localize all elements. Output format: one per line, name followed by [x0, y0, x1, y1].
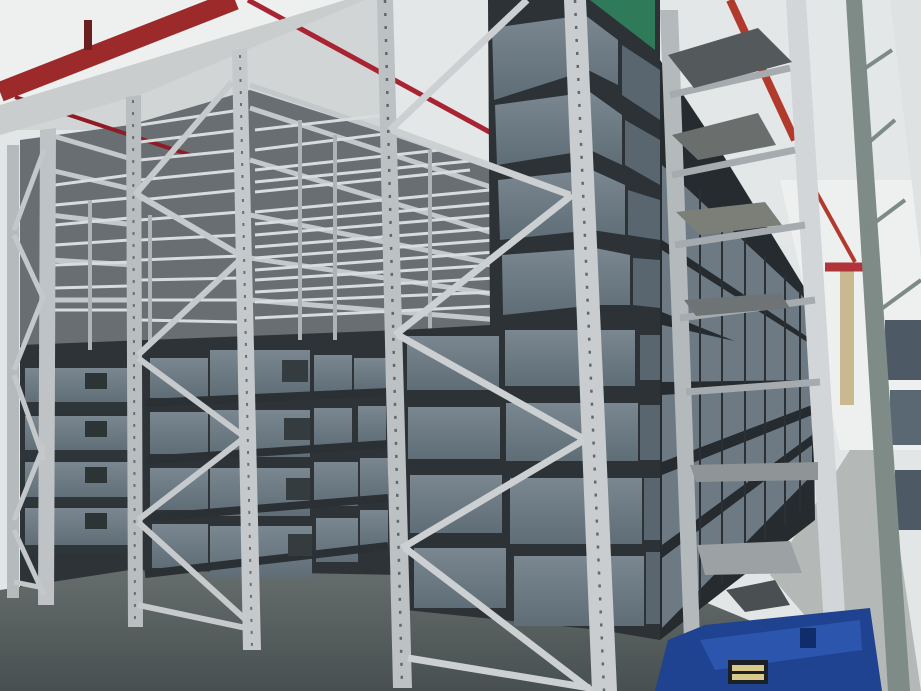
upper shelf decks: [50, 85, 500, 350]
dark backing behind front bin stack: [402, 0, 660, 640]
bins: front rack column: [407, 15, 660, 626]
wall stripe: [840, 270, 854, 405]
right rack frame: [846, 0, 921, 691]
bins receding to the right: [590, 0, 815, 640]
floor: [0, 450, 921, 691]
bins: middle rack: [145, 350, 388, 578]
right rack background: [885, 320, 921, 530]
rack frame: left: [7, 128, 56, 605]
ceiling beam: [0, 0, 365, 135]
rack frame: middle: [126, 48, 261, 650]
red pipes: [0, 0, 870, 267]
robot mast: [660, 0, 848, 660]
robot trays: [668, 28, 818, 575]
robot base: [655, 580, 882, 691]
back wall darkness behind racks: [20, 90, 500, 590]
rack frame: front: [377, 0, 617, 691]
bins: left rack: [20, 368, 135, 554]
